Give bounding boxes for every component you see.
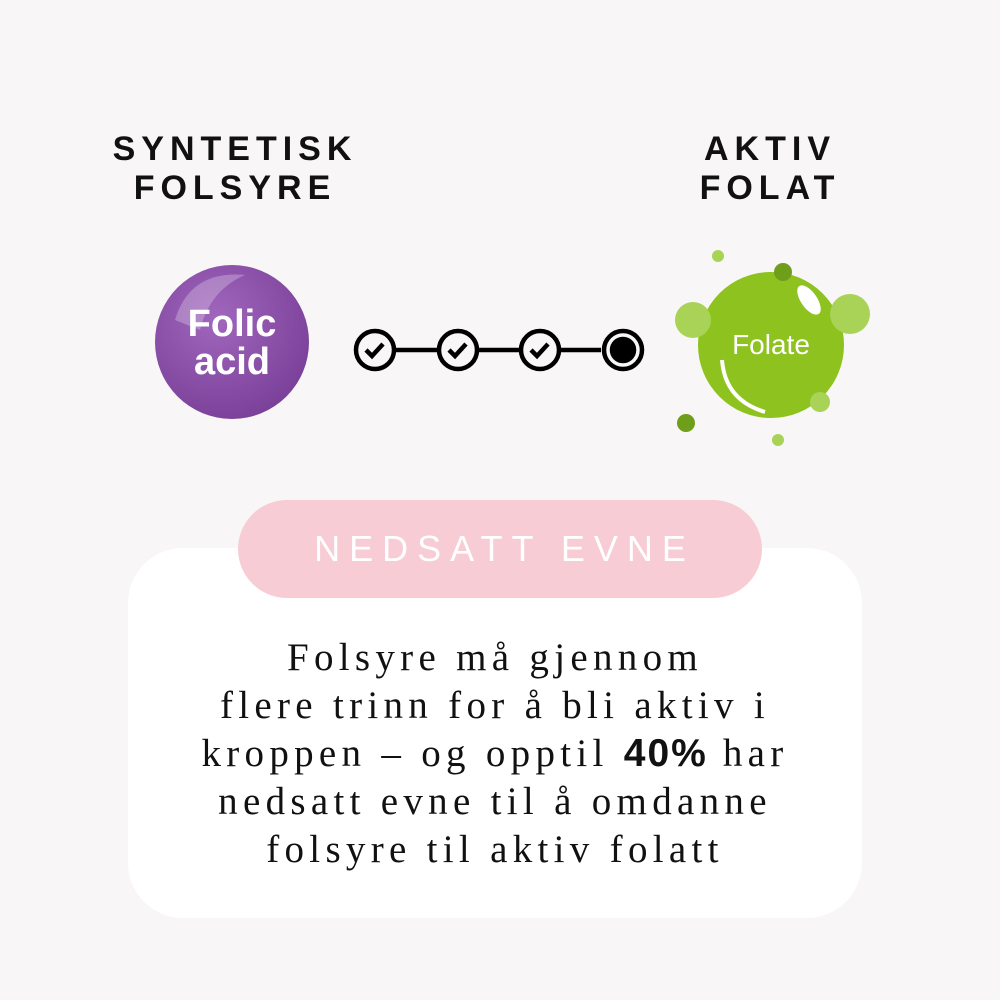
text block: folsyre til aktiv folatt	[266, 828, 724, 871]
heading: aktiv folat	[700, 130, 840, 207]
heading: aktiv folat: AKTIV	[704, 130, 836, 168]
text block: kroppen – og opptil 40% har	[201, 732, 789, 775]
icon: folate bubble	[675, 250, 870, 446]
text block: flere trinn for å bli aktiv i	[220, 684, 770, 727]
heading: syntetisk folsyre: SYNTETISK	[113, 130, 357, 168]
text block: Folsyre må gjennom	[287, 636, 703, 679]
steps progress	[356, 331, 642, 369]
icon: folate bubble: Folate	[732, 329, 810, 360]
pill: nedsatt evne: NEDSATT EVNE	[314, 528, 695, 569]
illustration row	[155, 250, 870, 446]
panel: info card	[128, 548, 862, 918]
heading: syntetisk folsyre: FOLSYRE	[134, 169, 336, 207]
icon: folic acid ball	[155, 265, 309, 419]
icon: folic acid ball: acid	[194, 341, 270, 383]
text block: nedsatt evne til å omdanne	[218, 780, 772, 823]
pill: nedsatt evne	[238, 500, 762, 598]
heading: aktiv folat: FOLAT	[700, 169, 840, 207]
heading: syntetisk folsyre	[113, 130, 357, 207]
icon: folic acid ball: Folic	[188, 303, 276, 345]
text block	[201, 636, 789, 871]
